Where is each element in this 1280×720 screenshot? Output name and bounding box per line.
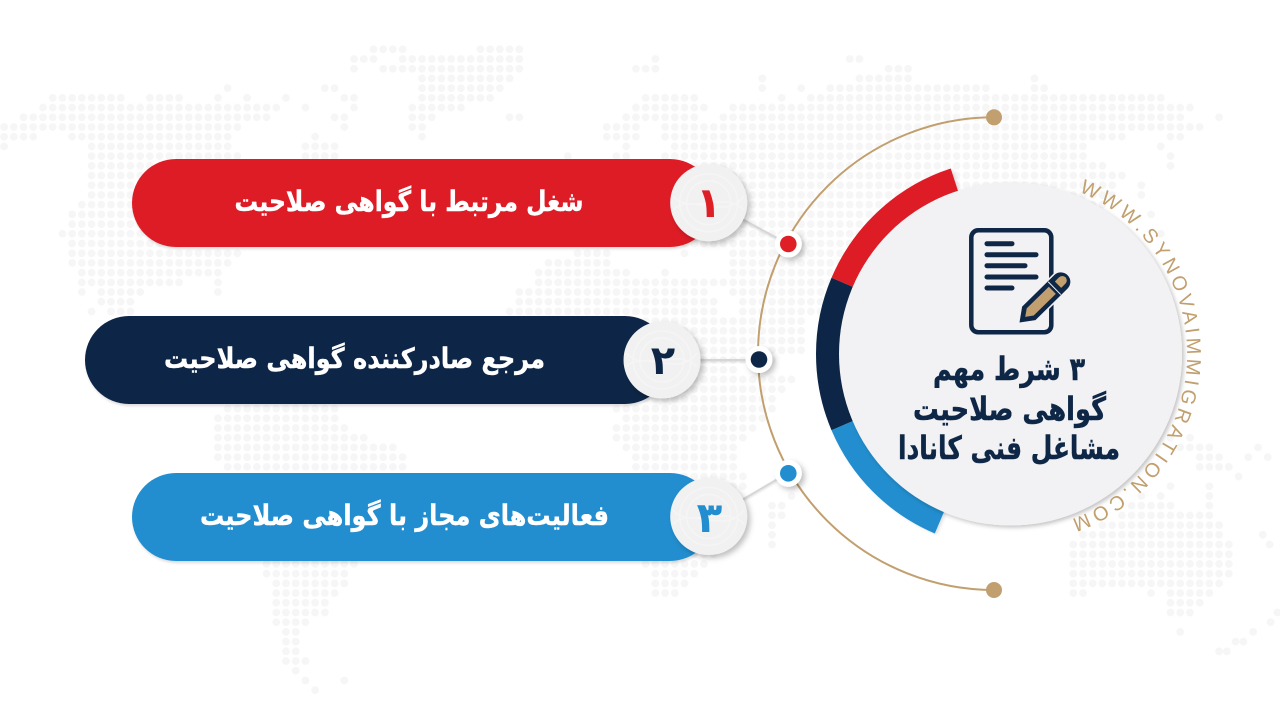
- centre title: مشاغل فنی کانادا: [898, 429, 1120, 467]
- number badge 3: ۳: [697, 493, 723, 542]
- centre title: ۳ شرط مهم: [933, 350, 1085, 388]
- node dot red: [775, 230, 802, 258]
- item 1: red pill: [132, 159, 714, 247]
- item 1 label: شغل مرتبط با گواهی صلاحیت: [234, 185, 584, 218]
- central circle: [839, 182, 1182, 526]
- item 2: navy pill: [85, 316, 669, 404]
- tri-colour ring segments: [828, 180, 954, 522]
- curved website text: WWW.SYNOVAIMMIGRATION.COM: [1073, 179, 1201, 532]
- node dot navy: [746, 346, 772, 373]
- item 3: blue pill: [132, 473, 714, 561]
- centre title: [898, 350, 1120, 467]
- item 3 label: فعالیت‌های مجاز با گواهی صلاحیت: [200, 499, 609, 532]
- number badge 1: [670, 164, 747, 241]
- number badge 3: [670, 478, 747, 555]
- centre title: گواهی صلاحیت: [913, 390, 1106, 428]
- number badge 2: [624, 322, 700, 398]
- item 2 label: مرجع صادرکننده گواهی صلاحیت: [164, 342, 545, 375]
- number badge 2: ۲: [651, 338, 675, 384]
- icon: document with pencil: [971, 230, 1074, 332]
- number badge 1: ۱: [696, 178, 722, 227]
- gold semicircular arc with end dots: [758, 109, 1002, 598]
- connector lines: [695, 219, 788, 500]
- node dot blue: [775, 460, 802, 487]
